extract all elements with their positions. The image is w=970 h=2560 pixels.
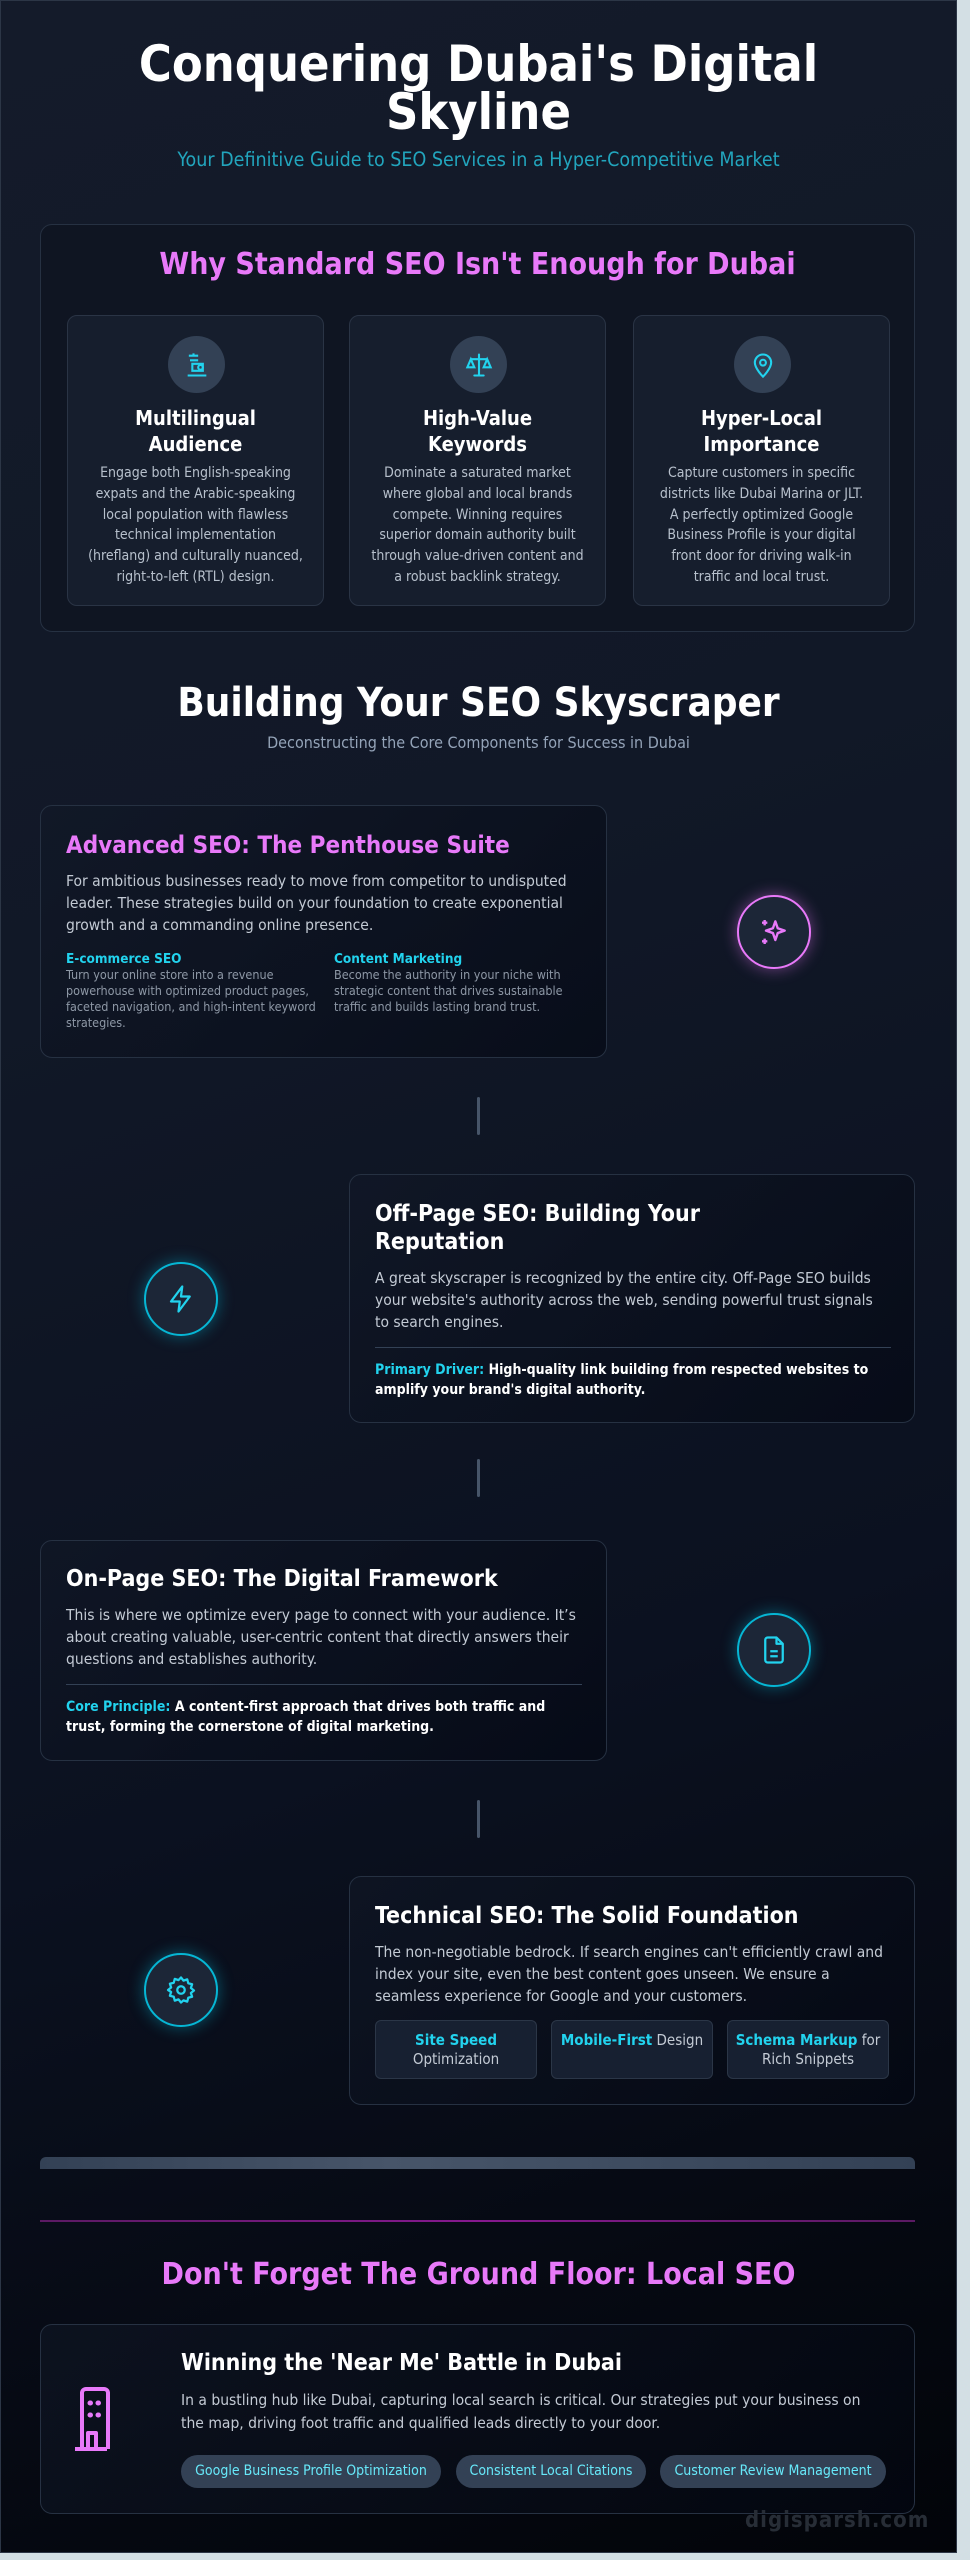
card text: Business Profile is your digital (667, 527, 856, 543)
card text: Dominate a saturated market where global and local brands compete. Winning requires superior domain authority built through value-driven content and a robust backlink strategy. (371, 465, 584, 585)
heading: Advanced SEO: The Penthouse Suite (66, 831, 510, 859)
divider + primary driver (375, 1347, 891, 1400)
card text (660, 465, 863, 585)
heading: local SEO: Don't Forget The Ground Floor: Local SEO (162, 2257, 795, 2292)
section heading: building your SEO skyscraper: Building Your SEO Skyscraper (177, 680, 780, 726)
chip: site speed: Optimization (413, 2050, 499, 2068)
card title (135, 406, 256, 456)
panel: local SEO (40, 2324, 915, 2514)
card title: Keywords (428, 432, 527, 456)
card: multilingual audience (67, 315, 324, 606)
chip: mobile-first: Mobile-First Design (561, 2031, 703, 2049)
pill: GBP (181, 2455, 441, 2488)
paragraph: the map, driving foot traffic and qualified leads directly to your door. (181, 2414, 660, 2432)
ground bar (40, 2157, 915, 2169)
sub-item: content marketing: Become the authority in your niche with strategic content that drives sustainable traffic and builds lasting brand trust. (334, 967, 563, 1014)
icon: document (737, 1613, 811, 1687)
card text: traffic and local trust. (694, 569, 829, 585)
chip: site speed: Site Speed (415, 2031, 497, 2049)
pill: reviews: Customer Review Management (674, 2463, 872, 2479)
pill: GBP: Google Business Profile Optimization (195, 2463, 427, 2479)
card title (701, 406, 822, 456)
icon: building (75, 2387, 110, 2451)
chip: schema markup (727, 2020, 889, 2079)
divider + core principle (66, 1684, 582, 1737)
icon: gear (144, 1953, 218, 2027)
panel heading: Why Standard SEO Isn't Enough for Dubai (159, 247, 796, 282)
connector (477, 1097, 480, 1135)
chip: schema markup: Schema Markup for (736, 2031, 880, 2049)
paragraph: A great skyscraper is recognized by the entire city. Off-Page SEO builds your website's authority across the web, sending powerful trust signals to search engines. (375, 1269, 873, 1331)
card title: Importance (704, 432, 820, 456)
watermark: digisparsh.com (745, 2508, 929, 2533)
card title: Multilingual (135, 406, 256, 430)
pill: citations: Consistent Local Citations (470, 2463, 632, 2479)
chip: site speed (375, 2020, 537, 2079)
title (139, 35, 818, 141)
heading: Technical SEO: The Solid Foundation (375, 1903, 799, 1929)
connector (477, 1800, 480, 1838)
section subtitle: Deconstructing the Core Components for Success in Dubai (267, 733, 690, 752)
paragraph: In a bustling hub like Dubai, capturing local search is critical. Our strategies put your business on (181, 2391, 860, 2409)
card text: front door for driving walk-in (671, 548, 852, 564)
paragraph: For ambitious businesses ready to move from competitor to undisputed leader. These strategies build on your foundation to create exponential growth and a commanding online presence. (66, 872, 567, 934)
divider + primary driver: Primary Driver: High-quality link building from respected websites to amplify your brand's digital authority. (375, 1362, 868, 1398)
panel: off-page SEO (349, 1174, 915, 1423)
title: Skyline (386, 83, 571, 141)
sub-item: content marketing: Content Marketing (334, 951, 462, 967)
pill: reviews (660, 2455, 886, 2488)
chip: mobile-first (551, 2020, 713, 2079)
icon: map pin (734, 336, 791, 393)
panel: on-page SEO (40, 1540, 607, 1761)
heading: On-Page SEO: The Digital Framework (66, 1566, 498, 1592)
paragraph: This is where we optimize every page to connect with your audience. It’s about creating valuable, user-centric content that directly answers their questions and establishes authority. (66, 1606, 576, 1668)
pill: citations (456, 2455, 646, 2488)
sub-item: e-commerce SEO: E-commerce SEO (66, 951, 181, 967)
divider + core principle: Core Principle: A content-first approach that drives both traffic and trust, forming the cornerstone of digital marketing. (66, 1699, 545, 1735)
divider line (40, 2220, 915, 2222)
title: Winning the 'Near Me' Battle in Dubai (181, 2350, 622, 2376)
card: high-value keywords (349, 315, 606, 606)
card text: Capture customers in specific (668, 465, 855, 481)
icon: scale (450, 336, 507, 393)
connector (477, 1459, 480, 1497)
panel: technical SEO (349, 1876, 915, 2105)
icon: language (168, 336, 225, 393)
paragraph (181, 2391, 860, 2432)
heading: Off-Page SEO: Building Your Reputation (375, 1201, 700, 1255)
chip: schema markup: Rich Snippets (762, 2050, 854, 2068)
card text: districts like Dubai Marina or JLT. (660, 486, 863, 502)
card title: Audience (149, 432, 242, 456)
sub-item: e-commerce SEO: Turn your online store into a revenue powerhouse with optimized product pages, faceted navigation, and high-intent keyword strategies. (66, 967, 316, 1030)
title: Conquering Dubai's Digital (139, 35, 818, 93)
panel: why standard SEO isn't enough (40, 224, 915, 632)
card title: High-Value (423, 406, 532, 430)
panel: advanced SEO (40, 805, 607, 1058)
card text: Engage both English-speaking expats and the Arabic-speaking local population with flawless technical implementation (hreflang) and culturally nuanced, right-to-left (RTL) design. (88, 465, 303, 585)
subtitle: Your Definitive Guide to SEO Services in a Hyper-Competitive Market (177, 148, 780, 171)
card title (423, 406, 532, 456)
icon: lightning (144, 1262, 218, 1336)
card title: Hyper-Local (701, 406, 822, 430)
card: hyper-local importance (633, 315, 890, 606)
paragraph: The non-negotiable bedrock. If search engines can't efficiently crawl and index your site, even the best content goes unseen. We ensure a seamless experience for Google and your customers. (375, 1943, 883, 2005)
icon: sparkles (737, 895, 811, 969)
card text: A perfectly optimized Google (670, 507, 853, 523)
